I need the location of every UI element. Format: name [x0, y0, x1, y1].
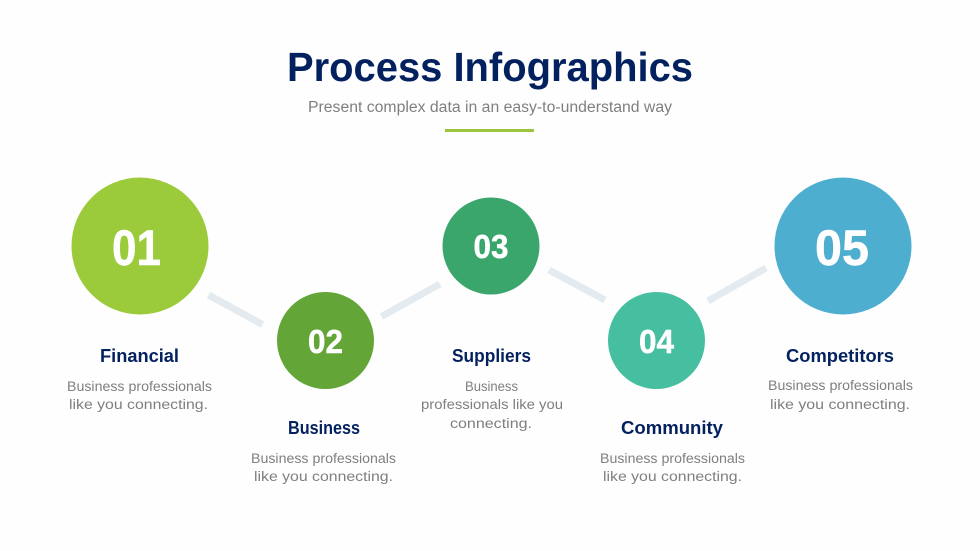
step 3 badge — [442, 198, 540, 294]
step 5 badge — [774, 178, 912, 314]
step 5 badge: 05 — [815, 220, 869, 276]
step 5 text: Competitors: Competitors — [786, 345, 894, 366]
step 4 badge: 04 — [639, 324, 674, 361]
step 1 text: Financial: Financial — [100, 345, 179, 366]
step 4 badge — [608, 292, 705, 389]
step 4 text: Community: Business professionals — [600, 451, 745, 467]
title: Process Infographics — [287, 44, 693, 90]
step 4 text: Community — [600, 417, 745, 485]
step 5 text: Competitors: like you connecting. — [770, 397, 910, 413]
subtitle: Present complex data in an easy-to-understand way — [308, 99, 672, 116]
step 1 badge: 01 — [112, 220, 161, 276]
step 1 text: Financial: like you connecting. — [69, 397, 208, 413]
step 1 text: Financial — [67, 345, 212, 413]
step 2 text: Business — [251, 417, 396, 485]
step 4 text: Community: Community — [621, 417, 724, 438]
step 3 text: Suppliers — [421, 345, 563, 432]
step 2 text: Business: Business professionals — [251, 451, 396, 467]
arrow: connector 3 to 4 — [549, 270, 605, 300]
step 2 badge: 02 — [308, 324, 343, 361]
step 1 badge — [72, 178, 208, 314]
arrow: connector 2 to 3 — [382, 284, 440, 316]
step 5 text: Competitors: Business professionals — [768, 378, 913, 394]
step 5 text: Competitors — [768, 345, 913, 413]
step 1 text: Financial: Business professionals — [67, 379, 212, 395]
step 4 text: Community: like you connecting. — [603, 469, 742, 485]
step 3 text: Suppliers: Business — [465, 379, 518, 395]
step 2 text: Business: Business — [288, 417, 360, 438]
arrow: connector 4 to 5 — [708, 268, 766, 301]
step 3 text: Suppliers: Suppliers — [452, 345, 531, 366]
step 3 badge: 03 — [474, 229, 508, 266]
step 2 text: Business: like you connecting. — [254, 469, 393, 485]
step 3 text: Suppliers: professionals like you — [421, 397, 563, 413]
arrow: connector 1 to 2 — [208, 295, 262, 324]
step 3 text: Suppliers: connecting. — [450, 416, 532, 432]
title accent underline — [445, 129, 534, 132]
step 2 badge — [277, 292, 374, 389]
